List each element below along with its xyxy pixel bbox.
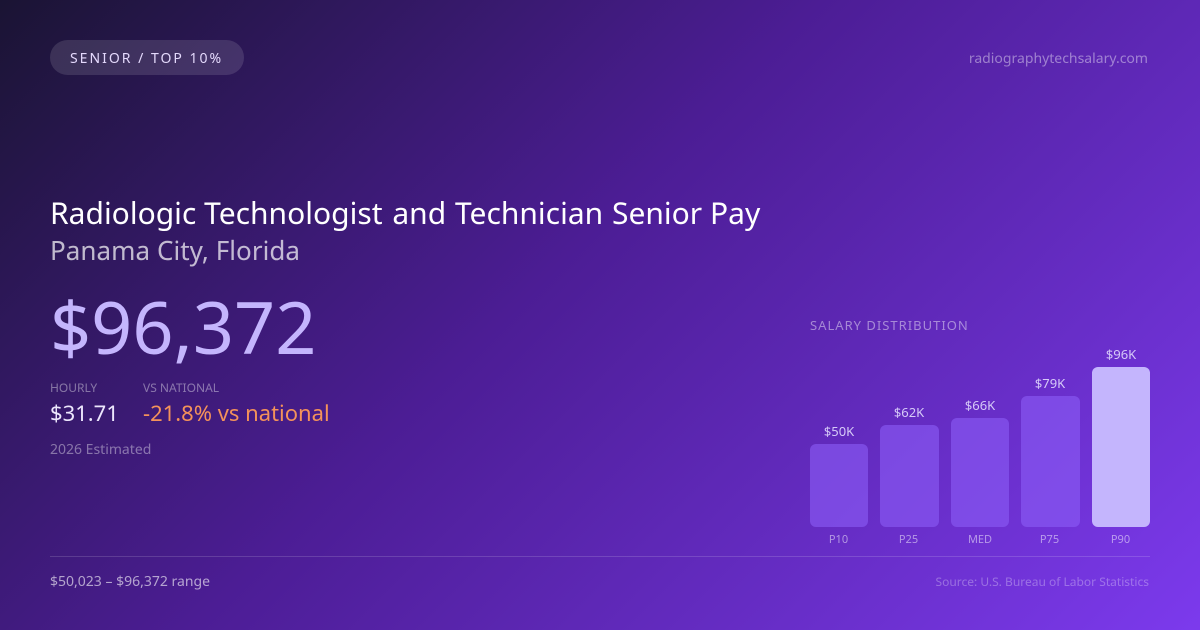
median bar bbox=[951, 418, 1009, 527]
P75 bar bbox=[1021, 396, 1080, 527]
source note: Source: U.S. Bureau of Labor Statistics bbox=[936, 573, 1149, 590]
P75 value: $79K bbox=[1035, 374, 1065, 392]
P75 label: P75 bbox=[1040, 532, 1059, 547]
bar chart: salary distribution bbox=[810, 316, 1150, 547]
subtitle: location: Panama City, Florida bbox=[50, 232, 300, 268]
P10 bar bbox=[810, 444, 868, 527]
median value: $66K bbox=[965, 396, 995, 414]
P10 label: P10 bbox=[829, 532, 848, 547]
P25 value: $62K bbox=[894, 403, 924, 421]
P90 bar bbox=[1092, 367, 1150, 527]
P25 bar bbox=[880, 425, 939, 527]
versus national value: -21.8% vs national bbox=[143, 398, 330, 428]
site domain: radiographytechsalary.com bbox=[969, 49, 1148, 68]
estimate note: 2026 Estimated bbox=[50, 440, 151, 459]
P10 value: $50K bbox=[824, 422, 854, 440]
versus national label: VS NATIONAL bbox=[143, 379, 219, 396]
badge label: SENIOR / TOP 10% bbox=[70, 49, 223, 68]
hourly value: $31.71 bbox=[50, 398, 119, 428]
headline salary: $96,372 bbox=[50, 278, 316, 376]
hourly label: HOURLY bbox=[50, 379, 97, 396]
stat: hourly bbox=[50, 379, 119, 428]
median label: MED bbox=[968, 532, 992, 547]
badge: senior / top 10% bbox=[50, 40, 244, 75]
P25 label: P25 bbox=[899, 532, 918, 547]
salary range: $50,023 – $96,372 range bbox=[50, 572, 210, 591]
P90 value: $96K bbox=[1106, 345, 1136, 363]
P90 label: P90 bbox=[1111, 532, 1130, 547]
stat: versus national bbox=[143, 379, 330, 428]
title: Radiologic Technologist and Technician Senior Pay bbox=[50, 192, 760, 233]
chart heading: SALARY DISTRIBUTION bbox=[810, 316, 969, 334]
